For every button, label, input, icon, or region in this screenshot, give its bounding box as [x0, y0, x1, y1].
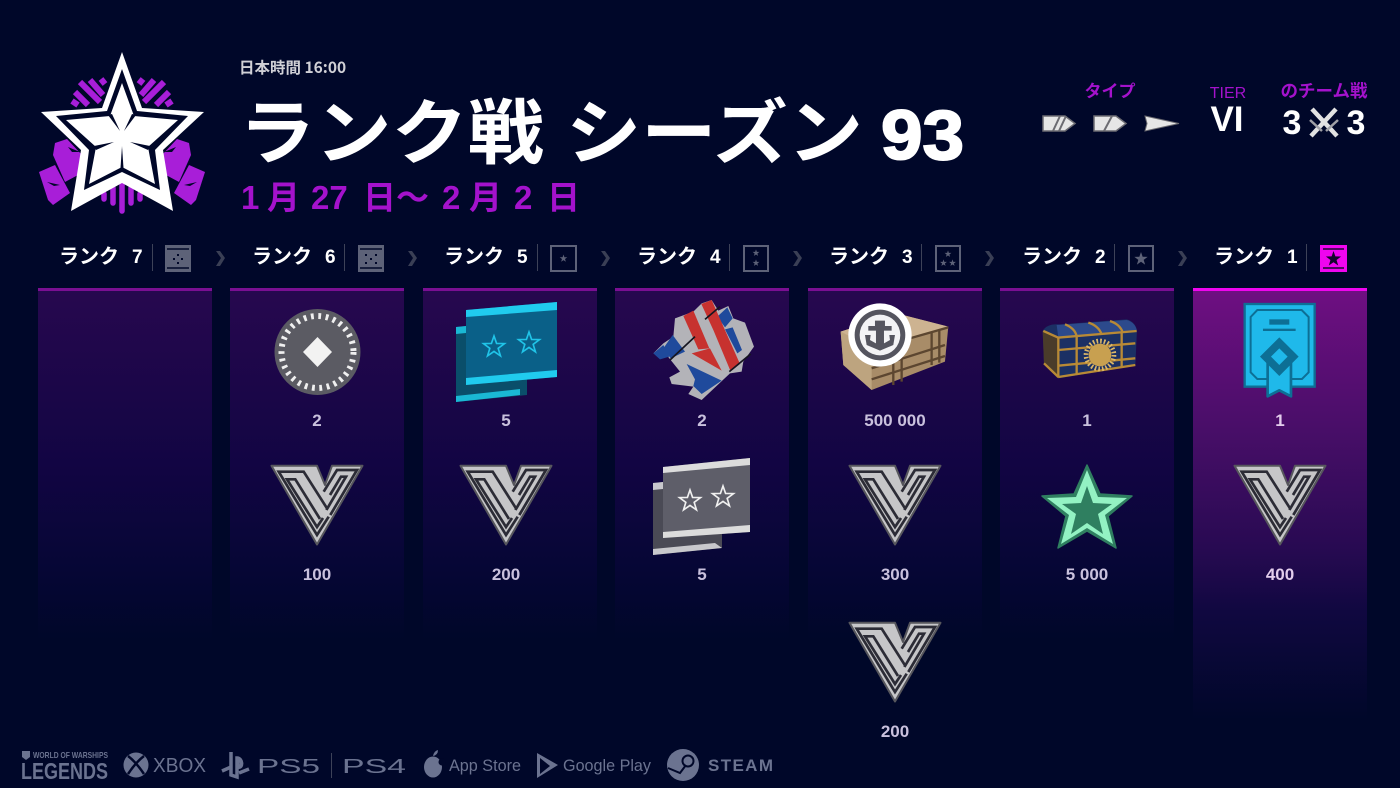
amount: 5: [501, 411, 511, 430]
ship types: タイプ: [1084, 77, 1136, 102]
icon: certificate: [1245, 304, 1315, 396]
logo: World of Warships Legends: LEGENDS: [21, 758, 108, 784]
amount: 400: [1266, 565, 1294, 584]
panel: rank 6: [230, 288, 404, 640]
tier: VI: [1210, 100, 1244, 139]
rank header 3: [829, 240, 960, 271]
logo: Steam: STEAM: [708, 756, 773, 775]
logo: Xbox: XBOX: [153, 755, 206, 777]
team battle 3 vs 3: [1281, 78, 1368, 142]
icon: V points: [1234, 466, 1326, 544]
rank header 7: 7: [132, 247, 143, 268]
amount: 2: [312, 411, 322, 430]
title: シーズン: [566, 77, 863, 179]
logo: World of Warships Legends: [21, 750, 108, 784]
icon: green star: [1042, 465, 1132, 548]
title: [239, 77, 964, 179]
icon: V points: [272, 466, 362, 544]
rank header 2: ランク: [1022, 240, 1082, 269]
team battle 3 vs 3: のチーム戦: [1281, 78, 1368, 103]
date range: 日: [547, 179, 580, 216]
date range: 月: [267, 179, 300, 216]
rank header 4: 4: [710, 247, 721, 268]
panel: rank 1: [1193, 288, 1367, 720]
rank header 4: [637, 240, 768, 271]
amount: 5 000: [1066, 565, 1108, 584]
icon: grey signal flag: [653, 458, 750, 555]
logo: Google Play: [537, 753, 651, 778]
chevron: [793, 251, 802, 266]
rank header 1: ランク: [1214, 240, 1274, 269]
amount: 300: [881, 565, 909, 584]
panel: rank 5: [423, 288, 597, 640]
rank header 2: [1022, 240, 1153, 271]
rank header 1: 1: [1287, 247, 1298, 268]
chevron: [985, 251, 994, 266]
footer: platform logos: [21, 749, 773, 784]
icon: treasure chest: [1043, 319, 1137, 378]
icon: V points: [460, 466, 552, 544]
date range: 2: [514, 179, 532, 216]
rank header 6: [252, 240, 384, 272]
icon: camouflage: [653, 300, 754, 400]
logo: App Store: App Store: [449, 756, 521, 775]
title: 93: [881, 96, 964, 174]
rank header 2: 2: [1095, 247, 1106, 268]
date range: ～: [396, 179, 429, 216]
date range: 27: [311, 179, 348, 216]
time label: 日本時間 16:00: [239, 56, 346, 78]
icon: medal: [274, 309, 360, 395]
icon: V points: [850, 623, 940, 702]
amount: 100: [303, 565, 331, 584]
amount: 5: [697, 565, 707, 584]
date range: 1: [241, 179, 259, 216]
tier: TIER: [1210, 85, 1246, 102]
icon: credits crate: [841, 303, 948, 390]
tier: [1210, 85, 1246, 139]
logo: PS5: PS5: [257, 756, 320, 778]
amount: 2: [697, 411, 707, 430]
rank header 6: ランク: [252, 240, 312, 269]
amount: 500 000: [864, 411, 926, 430]
logo: PS4: [331, 753, 406, 778]
rank header 5: [444, 240, 576, 271]
logo: PS5: [222, 752, 320, 778]
logo: App Store: [424, 750, 521, 778]
date range: [241, 179, 580, 216]
logo: Google Play: Google Play: [563, 756, 651, 775]
amount: 200: [881, 722, 909, 741]
rank header 3: ランク: [829, 240, 889, 269]
title: ランク戦: [239, 77, 544, 179]
ship types: [1043, 77, 1179, 131]
amount: 200: [492, 565, 520, 584]
rank header 1: [1214, 240, 1347, 272]
panel: rank 7: [38, 288, 212, 640]
emblem: rank star: [39, 52, 205, 211]
rank header 5: 5: [517, 247, 528, 268]
panel: rank 3: [808, 288, 982, 741]
logo: World of Warships Legends: WORLD OF WARSHIPS: [33, 750, 108, 760]
rank header 6: 6: [325, 247, 336, 268]
team battle 3 vs 3: 3: [1283, 104, 1301, 142]
chevron: [601, 251, 610, 266]
logo: PS4: PS4: [342, 756, 406, 778]
panel: rank 2: [1000, 288, 1174, 640]
rank header 4: ランク: [637, 240, 697, 269]
icon: V points: [850, 466, 940, 544]
rank header 3: 3: [902, 247, 913, 268]
chevron: [408, 251, 417, 266]
date range: 月: [469, 179, 502, 216]
logo: Steam: [667, 749, 773, 781]
rank header 7: [59, 240, 191, 272]
icon: blue signal flag: [456, 302, 557, 402]
chevron: [216, 251, 225, 266]
chevron: [1178, 251, 1187, 266]
rank header 7: ランク: [59, 240, 119, 269]
panel: rank 4: [615, 288, 789, 640]
date range: 日: [363, 179, 396, 216]
amount: 1: [1082, 411, 1092, 430]
rank header 5: ランク: [444, 240, 504, 269]
team battle 3 vs 3: 3: [1347, 104, 1365, 142]
date range: 2: [442, 179, 460, 216]
logo: Xbox: [124, 752, 206, 778]
amount: 1: [1275, 411, 1285, 430]
